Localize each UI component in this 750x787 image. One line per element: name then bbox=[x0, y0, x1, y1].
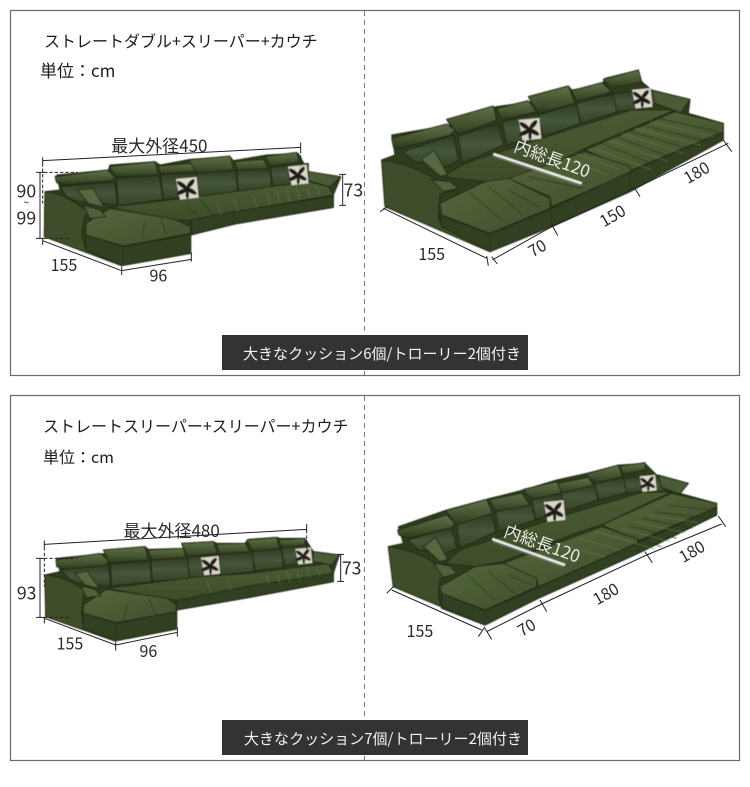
caption bar: 大きなクッション6個/トローリー2個付き bbox=[243, 343, 521, 364]
text: unit: 単位：cm bbox=[40, 57, 115, 82]
measure line: inner length bbox=[492, 539, 565, 567]
panel: straight double sleeper + sleeper + chaise bbox=[10, 10, 740, 376]
sofa photo: green leather sectional bbox=[388, 463, 717, 625]
label: 180: 180 bbox=[588, 576, 623, 610]
caption bar bbox=[222, 335, 528, 370]
dimension lines bbox=[380, 140, 732, 266]
sofa diagram: large view with section dimensions bbox=[387, 463, 726, 642]
label: height 90 to 99: ~ bbox=[24, 194, 30, 209]
label: inner length 120: 内総長120 bbox=[511, 132, 594, 183]
label: inner length 120: 内総長120 bbox=[501, 517, 584, 568]
caption bar: 大きなクッション7個/トローリー2個付き bbox=[244, 728, 522, 749]
label: 96: 96 bbox=[139, 638, 157, 662]
label: height 90 to 99: 99 bbox=[17, 205, 36, 230]
label: 155: 155 bbox=[51, 252, 77, 276]
text: unit: 単位：cm bbox=[43, 444, 114, 468]
label: 73: 73 bbox=[342, 556, 361, 581]
label: max outer width 450: 最大外径450 bbox=[111, 132, 207, 157]
label: 155: 155 bbox=[418, 241, 445, 265]
sofa photo: green leather sectional bbox=[45, 537, 339, 641]
heading: model name: ストレートスリーパー+スリーパー+カウチ bbox=[43, 413, 348, 437]
label: max outer width 480: 最大外径480 bbox=[124, 517, 220, 542]
sofa photo: green leather sectional bbox=[44, 152, 341, 266]
label: 96: 96 bbox=[149, 263, 167, 287]
dimension lines bbox=[36, 524, 344, 651]
label: 155: 155 bbox=[57, 630, 83, 654]
label: height 93: 93 bbox=[17, 581, 36, 606]
label: 150: 150 bbox=[594, 198, 630, 232]
label: 73: 73 bbox=[344, 177, 363, 202]
sofa diagram: small view with overall dimensions bbox=[17, 517, 361, 662]
label: 180: 180 bbox=[678, 154, 714, 189]
label: height 90 to 99: 90 bbox=[17, 178, 36, 203]
measure line: inner length bbox=[493, 154, 582, 185]
label: 70: 70 bbox=[523, 232, 550, 262]
label: height 90 to 99 bbox=[17, 178, 36, 230]
sofa diagram: small view with overall dimensions bbox=[17, 132, 363, 287]
panel: straight sleeper + sleeper + chaise bbox=[10, 396, 740, 760]
dimension lines bbox=[36, 143, 346, 275]
label: 180: 180 bbox=[674, 533, 709, 568]
heading: model name: ストレートダブル+スリーパー+カウチ bbox=[44, 28, 318, 52]
caption bar bbox=[222, 720, 528, 755]
sofa photo: green leather sectional bbox=[382, 70, 723, 252]
sofa diagram: large view with section dimensions bbox=[380, 70, 732, 266]
label: 70: 70 bbox=[512, 612, 540, 641]
label: 155: 155 bbox=[407, 618, 433, 642]
dimension lines bbox=[387, 516, 726, 639]
